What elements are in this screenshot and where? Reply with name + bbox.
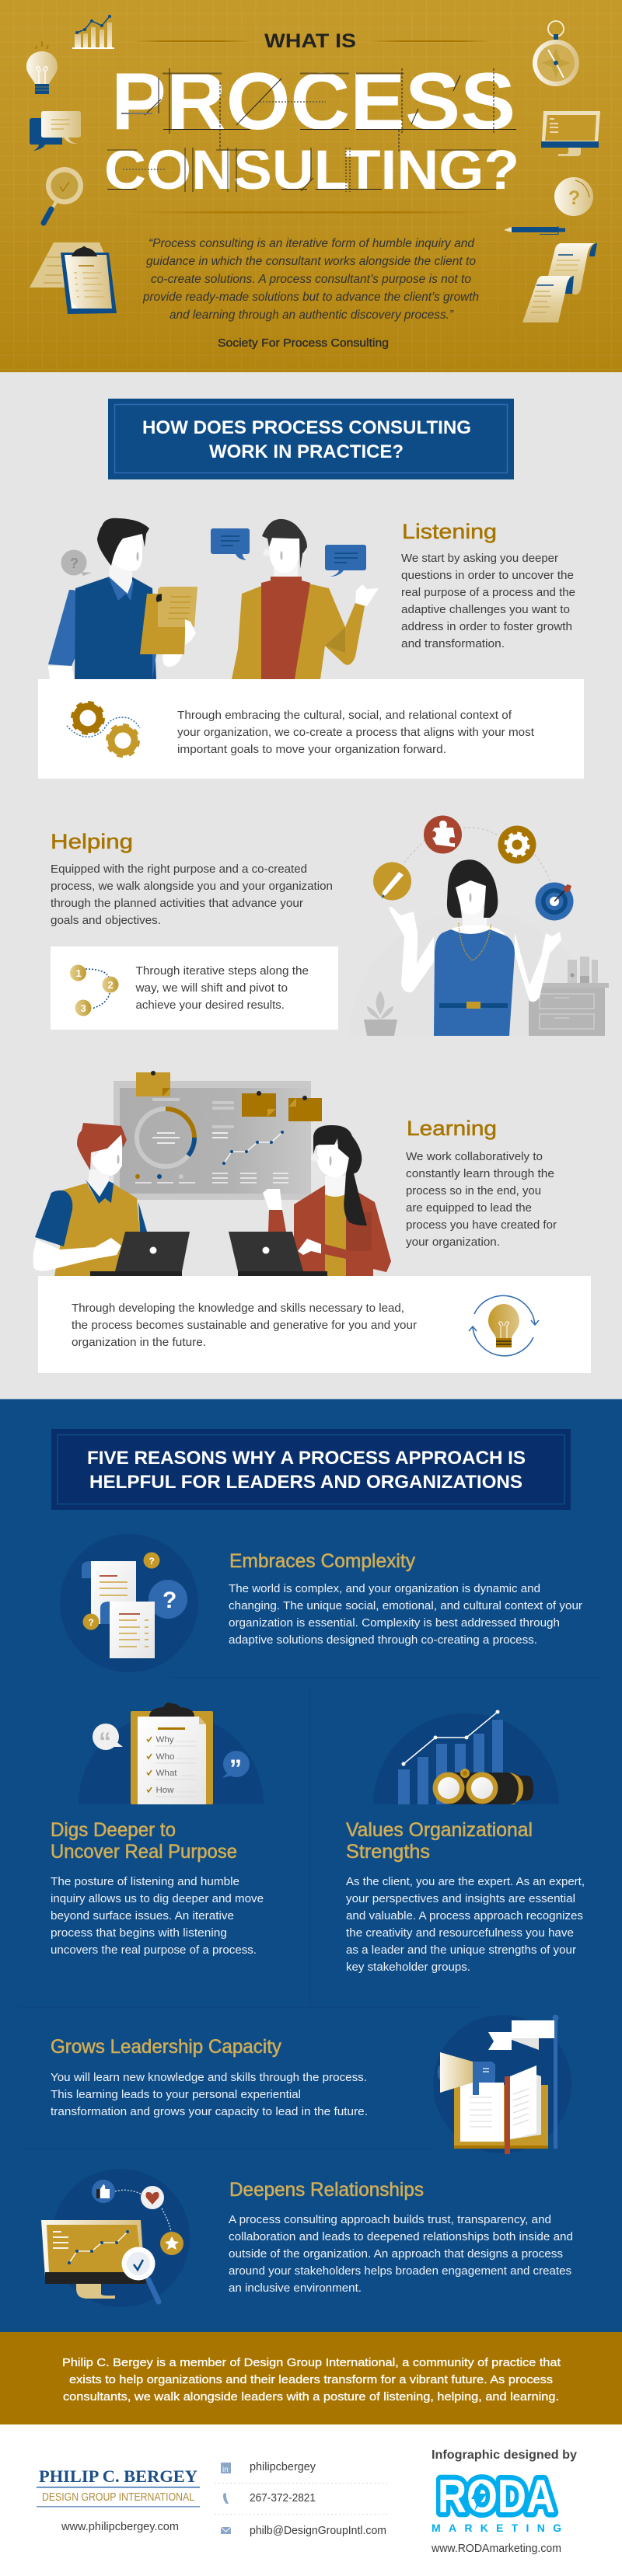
listening text: real purpose of a process and the	[401, 586, 575, 599]
text: digs deeper: inquiry allows us to dig deeper and move	[51, 1892, 264, 1905]
illustration: woman speaking	[232, 519, 379, 679]
section heading: five reasons: HELPFUL FOR LEADERS AND ORGANIZATIONS	[89, 1472, 522, 1493]
icon: monitor with social icons	[41, 2169, 190, 2307]
callout: cultural context: your organization, we co-create a process that aligns with your most	[177, 726, 535, 739]
title: process consulting	[104, 57, 519, 213]
illustration: woman with laptop	[229, 1125, 391, 1276]
website link: www.philipcbergey.com	[61, 2520, 179, 2533]
illustration: man with clipboard: ?	[70, 556, 79, 571]
learning text: We work collaboratively to	[406, 1150, 543, 1163]
logo: philip c. bergey: PHILIP C. BERGEY	[39, 2466, 197, 2486]
illustration: man with clipboard	[48, 518, 197, 679]
icon: question coin: ?	[568, 187, 580, 209]
section heading: five reasons: FIVE REASONS WHY A PROCESS APPROACH IS	[87, 1448, 526, 1469]
icon: light bulb	[26, 41, 58, 94]
callout: iterative steps: Through iterative steps along the	[135, 964, 309, 978]
section heading: how does process consulting work	[108, 399, 514, 479]
icon: why who what how clipboard: Why	[156, 1735, 174, 1745]
contact: linkedin	[221, 2460, 316, 2474]
contact: linkedin: in	[222, 2466, 229, 2474]
quote attribution: Society For Process Consulting	[218, 336, 389, 350]
icon: monitor	[541, 111, 600, 156]
icon: compass watch	[533, 21, 579, 86]
callout: sustainable process: organization in the future.	[72, 1336, 206, 1349]
section heading: how does process consulting work: WORK IN PRACTICE?	[209, 441, 404, 462]
icon: paper scrolls	[522, 243, 597, 322]
panel: footer	[0, 2424, 622, 2576]
title: what is: WHAT IS	[264, 30, 356, 52]
icon: clipboard and paper	[30, 242, 117, 314]
heading: grows leadership capacity: Grows Leadership Capacity	[51, 2036, 281, 2058]
panel: about band: consultants, we walk alongside leaders with a posture of listening, helping, and learning.	[63, 2390, 559, 2403]
text: embraces complexity: changing. The unique social, emotional, and cultural context of your	[229, 1599, 582, 1612]
website link: roda: www.RODAmarketing.com	[431, 2542, 561, 2555]
icon: bar chart	[72, 15, 114, 49]
text: digs deeper: uncovers the real purpose of a process.	[51, 1943, 257, 1957]
title: process consulting: PROCESS	[111, 57, 515, 147]
text: values organizational strengths: your perspectives and insights are essential	[346, 1892, 575, 1905]
title: process consulting: CONSULTING?	[104, 140, 519, 201]
text: digs deeper: The posture of listening and humble	[51, 1875, 239, 1888]
icon: magnifier	[44, 167, 83, 223]
illustration: woman juggling icons	[350, 816, 609, 1036]
contact: phone: 267-372-2821	[250, 2491, 316, 2505]
icon: why who what how clipboard	[79, 1703, 264, 1804]
heading: digs deeper	[51, 1819, 237, 1863]
listening text: address in order to foster growth	[401, 620, 572, 633]
text: grows leadership capacity	[51, 2071, 368, 2118]
icon: numbered steps	[70, 965, 118, 1016]
illustration: learning whiteboard	[114, 1071, 322, 1200]
heading: values organizational strengths: Strengths	[346, 1841, 430, 1863]
listening text	[401, 552, 575, 650]
logo: philip c. bergey: DESIGN GROUP INTERNATIONAL	[42, 2491, 194, 2504]
icon: numbered steps: 3	[81, 1002, 86, 1014]
listening text: We start by asking you deeper	[401, 552, 558, 565]
text: embraces complexity: The world is complex, and your organization is dynamic and	[229, 1582, 540, 1595]
logo: philip c. bergey	[37, 2466, 200, 2507]
icon: question coin	[554, 177, 593, 216]
icon: why who what how clipboard: Who	[156, 1752, 174, 1762]
helping heading: Helping	[51, 830, 133, 853]
heading: values organizational strengths: Values Organizational	[346, 1819, 533, 1841]
learning text: are equipped to lead the	[406, 1201, 532, 1215]
text: values organizational strengths: As the client, you are the expert. As an expert,	[346, 1875, 585, 1888]
icon: complexity documents: ?	[89, 1617, 94, 1628]
text: embraces complexity	[229, 1582, 582, 1647]
quote: and learning through an authentic discovery process.”	[169, 308, 454, 322]
learning text: process you have created for	[406, 1218, 557, 1232]
helping text: through the planned activities that advance your	[51, 897, 303, 910]
icon: speech bubble right	[325, 545, 366, 577]
callout: sustainable process	[38, 1276, 591, 1373]
callout: sustainable process: the process becomes sustainable and generative for you and your	[72, 1319, 417, 1332]
text: grows leadership capacity: transformation and grows your capacity to lead in the future.	[51, 2105, 368, 2118]
text: digs deeper: beyond surface issues. An iterative	[51, 1909, 234, 1922]
icon: chart with binoculars	[373, 1710, 559, 1804]
listening text: questions in order to uncover the	[401, 569, 574, 582]
text: values organizational strengths: and valuable. A process approach recognizes	[346, 1909, 583, 1922]
helping text: process, we walk alongside you and your organization	[51, 880, 333, 893]
icon: pencil	[373, 863, 411, 900]
icon: bulb with cycle arrows	[469, 1295, 539, 1356]
icon: target	[535, 883, 574, 920]
icon: gears	[67, 703, 140, 755]
callout: cultural context: important goals to move your organization forward.	[177, 743, 446, 756]
contact: phone	[223, 2491, 316, 2505]
icon: complexity documents: ?	[162, 1588, 176, 1613]
panel: about band: exists to help organizations and their leaders transform for a vibrant future. As process	[69, 2373, 553, 2386]
text: values organizational strengths	[346, 1875, 585, 1974]
icon: numbered steps: 1	[76, 967, 82, 979]
panel: about band	[0, 2332, 622, 2424]
helping text	[51, 863, 333, 927]
listening text: adaptive challenges you want to	[401, 603, 570, 616]
icon: why who what how clipboard: What	[156, 1769, 177, 1778]
icon: why who what how clipboard: ”	[229, 1755, 242, 1783]
icon: complexity documents: ?	[149, 1556, 155, 1567]
illustration: man with laptop	[33, 1123, 190, 1276]
text: deepens relationships	[229, 2213, 573, 2295]
icon: chat bubbles	[30, 111, 81, 151]
icon: why who what how clipboard: “	[99, 1727, 111, 1755]
text: deepens relationships: outside of the organization. An approach that designs a process	[229, 2247, 563, 2261]
text: digs deeper	[51, 1875, 264, 1957]
helping text: Equipped with the right purpose and a co-created	[51, 863, 307, 876]
callout: iterative steps	[51, 946, 338, 1030]
listening text: and transformation.	[401, 637, 505, 650]
credit heading: Infographic designed by	[432, 2449, 577, 2462]
contact: linkedin: philipcbergey	[250, 2460, 316, 2473]
icon: complexity documents	[60, 1534, 198, 1672]
icon: speech bubble left	[211, 528, 250, 560]
learning heading: Learning	[407, 1117, 497, 1140]
text: values organizational strengths: key stakeholder groups.	[346, 1961, 470, 1974]
contact: email: philb@DesignGroupIntl.com	[250, 2524, 386, 2537]
heading: values organizational strengths	[346, 1819, 533, 1863]
panel: five reasons	[0, 1399, 622, 2332]
text: digs deeper: process that begins with listening	[51, 1926, 227, 1940]
callout: cultural context	[38, 679, 584, 779]
text: values organizational strengths: the creativity and resourcefulness you have	[346, 1926, 574, 1940]
text: embraces complexity: organization is essential. Complexity is best addressed through	[229, 1616, 560, 1630]
helping text: goals and objectives.	[51, 914, 161, 927]
text: deepens relationships: around your stakeholders helps broaden engagement and creates	[229, 2264, 571, 2278]
logo: roda marketing: MARKETING	[432, 2522, 561, 2534]
text: grows leadership capacity: You will learn new knowledge and skills through the process.	[51, 2071, 367, 2084]
panel: how it works	[0, 372, 622, 1399]
text: deepens relationships: collaboration and leads to deepened relationships both inside and	[229, 2230, 573, 2243]
quote: guidance in which the consultant works alongside the client to	[146, 255, 476, 268]
text: values organizational strengths: as a leader and the unique strengths of your	[346, 1943, 576, 1957]
panel: header	[0, 0, 622, 372]
figure	[389, 859, 561, 1036]
callout: sustainable process: Through developing the knowledge and skills necessary to lead,	[72, 1302, 404, 1315]
icon: gear	[498, 825, 536, 864]
icon: book, megaphone and flag	[433, 2014, 571, 2154]
icon: puzzle	[424, 816, 462, 853]
callout: cultural context: Through embracing the cultural, social, and relational context of	[177, 709, 512, 722]
text: embraces complexity: adaptive solutions designed through co-creating a process.	[229, 1633, 537, 1647]
icon: numbered steps: 2	[107, 979, 114, 991]
heading: embraces complexity: Embraces Complexity	[229, 1550, 415, 1572]
quote: co-create solutions. A process consultant’s purpose is not to	[151, 273, 471, 286]
learning text: constantly learn through the	[406, 1167, 554, 1180]
icon: pen	[504, 226, 565, 235]
learning text: process so in the end, you	[406, 1184, 541, 1197]
callout: iterative steps: achieve your desired results.	[135, 999, 285, 1012]
sticky notes	[136, 1071, 322, 1121]
icon: why who what how clipboard: How	[156, 1786, 174, 1795]
learning text	[406, 1150, 557, 1249]
logo: roda marketing: RODA	[438, 2470, 555, 2522]
heading: digs deeper: Uncover Real Purpose	[51, 1841, 237, 1863]
panel: about band: Philip C. Bergey is a member of Design Group International, a community of practice that	[62, 2356, 561, 2369]
furniture and plant	[350, 912, 609, 1036]
section heading: how does process consulting work: HOW DOES PROCESS CONSULTING	[142, 417, 471, 438]
heading: deepens relationships: Deepens Relationships	[229, 2179, 424, 2201]
text: grows leadership capacity: This learning leads to your personal experiential	[51, 2088, 301, 2101]
text: deepens relationships: A process consulting approach builds trust, transparency, and	[229, 2213, 551, 2226]
section heading: five reasons	[51, 1429, 571, 1510]
callout: iterative steps: way, we will shift and pivot to	[135, 981, 288, 995]
quote: provide ready-made solutions but to advance the client’s growth	[142, 291, 479, 304]
heading: digs deeper: Digs Deeper to	[51, 1819, 176, 1841]
text: deepens relationships: an inclusive environment.	[229, 2281, 362, 2295]
listening heading: Listening	[402, 520, 497, 543]
quote: “Process consulting is an iterative form of humble inquiry and	[149, 237, 475, 250]
quote	[142, 237, 479, 322]
learning text: your organization.	[406, 1236, 500, 1249]
